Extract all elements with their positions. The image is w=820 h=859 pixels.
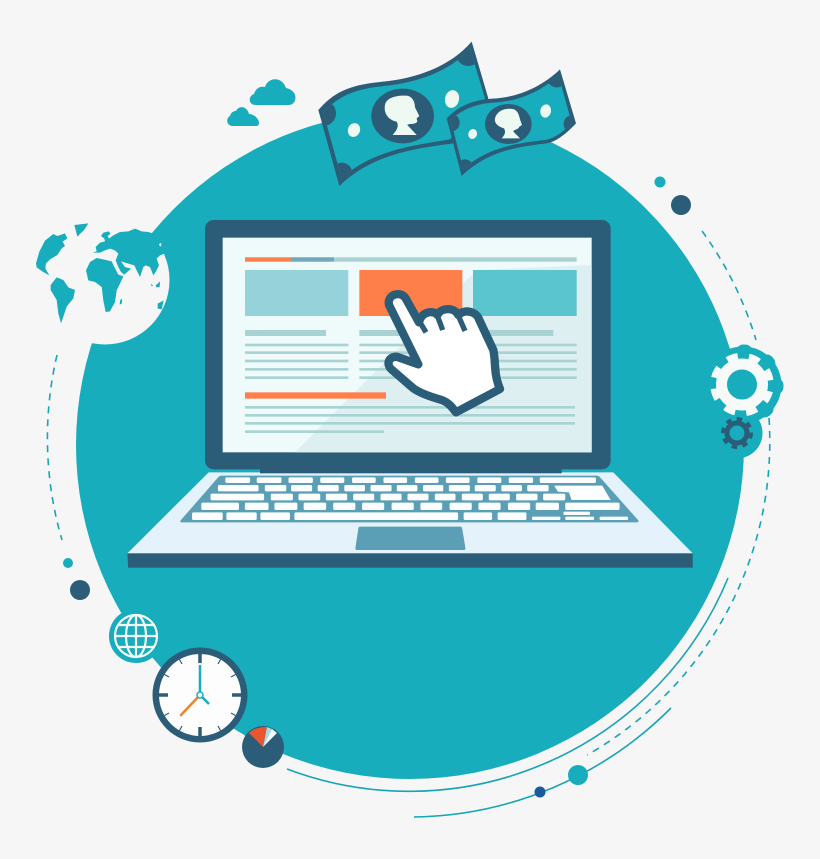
laptop [127, 220, 693, 568]
icon: gears [704, 346, 782, 458]
main teal circle [76, 111, 744, 779]
icon: world map [36, 216, 169, 344]
dashed and solid orbit arcs [47, 231, 770, 817]
accent dots [63, 176, 691, 798]
icon: clouds [227, 79, 295, 126]
icon: small banknote [442, 67, 582, 176]
keyboard [180, 476, 639, 522]
icon: globe badge [109, 609, 190, 680]
Africa and Eurasia [86, 229, 167, 312]
icon: large banknote [311, 41, 488, 186]
laptop screen [205, 220, 611, 473]
icon: pointing hand [389, 294, 500, 412]
Americas [36, 223, 88, 323]
icon: clock [152, 648, 252, 742]
laptop base [127, 472, 693, 568]
trackpad [355, 527, 465, 550]
web page layout [245, 257, 577, 433]
icon: pie chart [242, 726, 284, 768]
